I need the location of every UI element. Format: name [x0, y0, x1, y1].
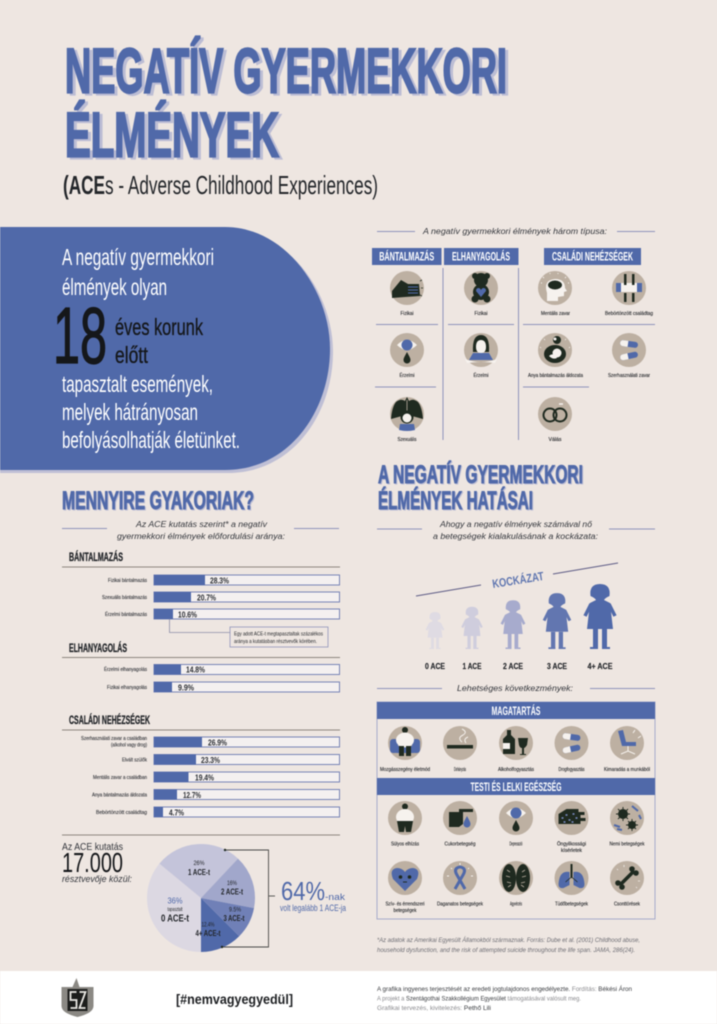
heading: effects: ÉLMÉNYEK HATÁSAI [378, 486, 533, 515]
label: Súlyos elhízás [391, 842, 419, 848]
pie chart: ACE counts: 9.5% [229, 908, 242, 914]
intro text: effects [433, 519, 599, 541]
bar chart: családi nehézségek: 19.4% [195, 772, 214, 782]
pie chart: ACE counts: 26% [194, 861, 205, 867]
footnote [377, 937, 640, 954]
bar chart: családi nehézségek: (alkohol vagy drog) [111, 742, 147, 748]
header: családi nehézségek: CSALÁDI NEHÉZSÉGEK [552, 248, 633, 264]
figure labels: 0 ACE [425, 661, 445, 671]
header: családi nehézségek [544, 248, 641, 265]
icon: sexual abuse [390, 397, 424, 431]
figure: 0 ACE [426, 612, 444, 649]
icon: heart [388, 861, 422, 895]
footnote: *Az adatok az Amerikai Egyesült Államokból származnak. Forrás: Dube et al. (2001) Childhood abuse, [377, 937, 640, 944]
panel: consequences [377, 702, 655, 919]
label: Csonttörések [614, 902, 640, 908]
title: ÉLMÉNYEK [65, 100, 279, 170]
bar chart: családi nehézségek: 4.7% [169, 808, 184, 818]
pie chart: ACE counts: 1 ACE-t [188, 868, 210, 877]
figure labels [425, 661, 613, 671]
panel: definition blob: éves korunk [115, 314, 203, 340]
label: Fizikai [400, 311, 414, 317]
bar chart: bántalmazás: BÁNTALMAZÁS [69, 549, 123, 564]
label: Anya bántalmazás áldozata [528, 373, 584, 379]
pie chart: ACE counts: 4+ ACE-t [196, 929, 221, 938]
header: bántalmazás [372, 248, 442, 265]
label: Nemi betegségek [610, 842, 645, 848]
panel: consequences: Agyvérzés [510, 902, 522, 908]
icon: pills [612, 333, 646, 367]
bar chart: bántalmazás: Fizikai bántalmazás [108, 578, 147, 584]
figure: 2 ACE [502, 600, 524, 649]
icon: STD virus [610, 801, 644, 835]
pie chart: ACE counts: 2 ACE-t [221, 888, 243, 896]
icon: cigarette [443, 726, 477, 760]
icon: bone [610, 861, 644, 895]
icon: brain stroke [499, 861, 533, 895]
bar chart: elhanyagolás: ELHANYAGOLÁS [69, 640, 127, 655]
icon: lungs [554, 861, 588, 895]
panel: definition blob: befolyásolhatják életünket. [62, 427, 240, 453]
header: magatartás [377, 702, 655, 719]
figure labels: 1 ACE [462, 661, 482, 671]
panel: definition blob [0, 227, 333, 473]
pie chart: ACE counts: 12.4% [202, 922, 215, 928]
bar chart: bántalmazás: 20.7% [197, 592, 216, 602]
subtitle: (ACEs - Adverse Childhood Experiences) [63, 170, 378, 200]
figure labels: 2 ACE [503, 661, 523, 671]
callout: 64 percent: -nak [325, 892, 346, 902]
callout: childhood abuse note: aránya a kutatásban résztvevők körében. [234, 639, 317, 645]
participants text [62, 842, 132, 885]
participants text: résztvevője közül: [62, 874, 132, 885]
bar chart: elhanyagolás [62, 640, 340, 692]
credits: A projekt a Szentágothai Szakkollégium Egyesület támogatásával valósult meg. [377, 996, 581, 1002]
callout: childhood abuse note [170, 619, 328, 647]
bar chart: bántalmazás: 28.3% [210, 576, 229, 586]
bar chart: bántalmazás: 10.6% [178, 610, 197, 620]
icon: office chair [610, 726, 644, 760]
label: Tüdőbetegségek [555, 902, 588, 908]
intro text: how common: Az ACE kutatás szerint* a negatív [135, 519, 268, 529]
label [557, 840, 586, 854]
icon: abused mother [538, 333, 572, 367]
panel: definition blob: melyek hátrányosan [62, 399, 198, 425]
label: betegségek [394, 908, 417, 914]
header: magatartás: MAGATARTÁS [492, 703, 540, 718]
bar chart: családi nehézségek: CSALÁDI NEHÉZSÉGEK [69, 712, 150, 727]
icon: alcohol [499, 726, 533, 760]
heading: how common: MENNYIRE GYAKORIAK? [62, 487, 254, 515]
bar chart: családi nehézségek: 23.3% [201, 755, 220, 765]
panel: definition blob: élmények olyan [62, 274, 167, 300]
intro text: how common: gyermekkori élmények előfordulási aránya: [117, 531, 286, 541]
panel: three types of ACE [372, 226, 655, 443]
bar chart: bántalmazás [62, 549, 340, 620]
bar chart: elhanyagolás: Fizikai elhanyagolás [107, 685, 147, 691]
panel: definition blob: tapasztalt események, [62, 371, 213, 397]
bar chart: bántalmazás: Szexuális bántalmazás [102, 595, 147, 601]
risk arrow [416, 563, 618, 596]
panel: footer [0, 971, 717, 1024]
icon: prison bars [612, 271, 646, 305]
callout: 64 percent [280, 876, 346, 913]
intro text: effects: Ahogy a negatív élmények számával nő [439, 519, 592, 529]
icon: pills [554, 726, 588, 760]
header: bántalmazás: BÁNTALMAZÁS [379, 248, 434, 264]
callout: 64 percent: 64% [281, 876, 325, 906]
header: testi és lelki egészség [377, 778, 655, 795]
panel: definition blob: előtt [115, 342, 148, 368]
callout: childhood abuse note: Egy adott ACE-t megtapasztaltak százalékos [234, 632, 323, 638]
label: Szív- és érrendszeri [386, 902, 424, 908]
types heading: A negatív gyermekkori élmények három típusa: [422, 226, 608, 236]
panel: consequences: Depresszió [510, 842, 522, 848]
icon: cancer ribbon [443, 861, 477, 895]
credits: Grafikai tervezés, kivitelezés: Pethő Lili [377, 1005, 491, 1012]
label [386, 902, 424, 914]
label: Mentális zavar [541, 311, 570, 317]
bracket [221, 849, 275, 948]
bar chart: bántalmazás: Érzelmi bántalmazás [105, 611, 147, 618]
header: elhanyagolás [444, 248, 518, 265]
label: Mozgásszegény életmód [380, 767, 430, 773]
label: Érzelmi [400, 372, 414, 379]
credits [377, 984, 632, 1012]
icon: wedding rings [538, 397, 572, 431]
icon: severe obesity [388, 801, 422, 835]
pie chart: ACE counts [147, 844, 255, 952]
label: Szexuális [398, 437, 417, 443]
bar chart: családi nehézségek: Bebörtönzött családtag [96, 810, 147, 816]
label: Daganatos betegségek [437, 902, 483, 908]
heading: effects: A NEGATÍV GYERMEKKORI [378, 460, 583, 489]
label: Válás [548, 437, 562, 443]
panel: consequences: Dohányzás [454, 767, 466, 773]
icon: sitting girl [464, 333, 498, 367]
pie chart: ACE counts: tapasztalt [168, 907, 183, 913]
bar chart: családi nehézségek: Szerhasználati zavar a családban [81, 736, 147, 742]
risk arrow: KOCKÁZAT [491, 568, 545, 591]
icon: self-harm hand [554, 801, 588, 835]
figure: 1 ACE [462, 607, 482, 649]
bar chart: családi nehézségek: 26.9% [208, 738, 227, 748]
bar chart: elhanyagolás: 14.8% [186, 664, 205, 674]
icon: depression eye [499, 801, 533, 835]
participants text: Az ACE kutatás [62, 842, 123, 853]
footnote: household dysfunction, and the risk of attempted suicide throughout the life span. JAMA, 286(24). [377, 948, 635, 954]
bar chart: családi nehézségek: Elvált szülők [122, 758, 147, 764]
icon: mental disorder head [538, 271, 572, 305]
consequences heading: Lehetséges következmények: [457, 683, 574, 693]
intro text: how common [117, 519, 286, 541]
label: Cukorbetegség [444, 842, 476, 848]
icon: diabetes [443, 801, 477, 835]
panel: definition blob: 18 [53, 291, 107, 380]
panel: definition blob: A negatív gyermekkori [62, 244, 214, 270]
icon: teddy bear [464, 271, 498, 305]
label: Alkoholfogyasztás [498, 767, 534, 773]
pie chart: ACE counts: 16% [227, 881, 238, 887]
label: Érzelmi [474, 372, 488, 379]
bar chart: családi nehézségek: Mentális zavar a családban [93, 775, 147, 781]
label: Kimaradás a munkából [604, 767, 650, 773]
pie chart: ACE counts: 0 ACE-t [161, 914, 190, 924]
callout: 64 percent: volt legalább 1 ACE-ja [280, 903, 346, 913]
label: Öngyilkossági [557, 840, 586, 848]
pie chart: ACE counts: 3 ACE-t [224, 914, 245, 923]
title [65, 36, 507, 170]
bar chart: elhanyagolás: Érzelmi elhanyagolás [104, 666, 147, 673]
pie chart: ACE counts: 36% [168, 896, 182, 906]
label: Drogfogyasztás [558, 767, 585, 773]
intro text: effects: a betegségek kialakulásának a kockázata: [433, 531, 599, 541]
icon: college crest [62, 978, 94, 1017]
label: kísérletek [561, 848, 582, 854]
bar chart: családi nehézségek: 12.7% [183, 790, 201, 800]
label: Bebörtönzött családtag [605, 311, 653, 317]
icon: unhealthy diet [388, 726, 422, 760]
header: testi és lelki egészség: TESTI ÉS LELKI EGÉSZSÉG [470, 779, 562, 794]
figure: 3 ACE [544, 593, 570, 649]
icon: fist [390, 271, 424, 305]
header: elhanyagolás: ELHANYAGOLÁS [452, 248, 510, 264]
heading: effects [378, 460, 583, 515]
icon: crying eye [390, 333, 424, 367]
participants text: 17.000 [62, 847, 123, 878]
bar chart: családi nehézségek [62, 712, 340, 818]
figure labels: 3 ACE [547, 661, 567, 671]
label: Szerhasználati zavar [608, 373, 650, 379]
bar chart: elhanyagolás: 9.9% [178, 682, 194, 692]
hashtag: [#nemvagyegyedül] [176, 991, 293, 1007]
credits: A grafika ingyenes terjesztését az eredeti jogtulajdonos engedélyezte. Fordítás: Békési Áron [377, 984, 632, 993]
label: Fizikai [474, 311, 488, 317]
figure: 4+ ACE [585, 584, 615, 649]
bar chart: családi nehézségek: Anya bántalmazás áldozata [92, 792, 148, 798]
figure labels: 4+ ACE [588, 661, 613, 671]
